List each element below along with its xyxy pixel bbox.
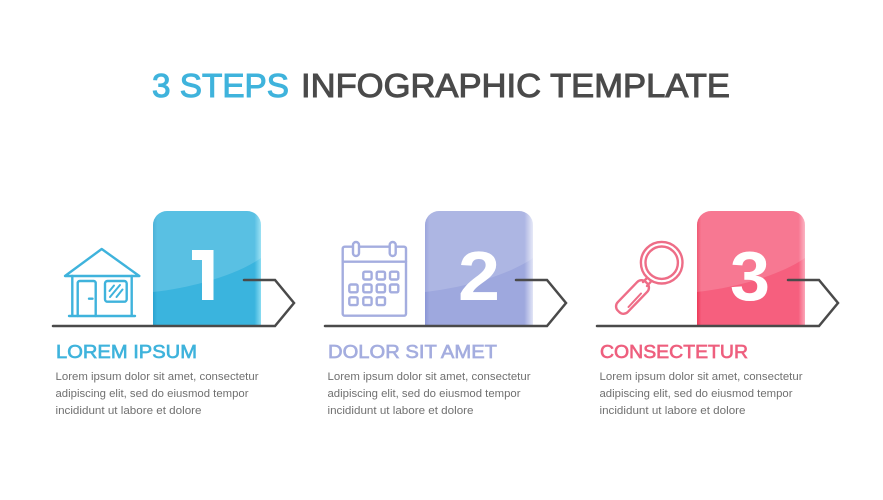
body text 3: adipiscing elit, sed do eiusmod tempor xyxy=(600,388,793,400)
body text 2: Lorem ipsum dolor sit amet, consectetur xyxy=(328,371,531,383)
body text 2 xyxy=(328,371,531,417)
arrow line 2 xyxy=(325,280,566,326)
arrow line 3 xyxy=(597,280,838,326)
heading 1: LOREM IPSUM xyxy=(56,341,197,362)
number 1: 1 xyxy=(187,237,225,315)
title: INFOGRAPHIC TEMPLATE xyxy=(301,67,730,104)
icon: calendar xyxy=(343,242,406,316)
icon: magnifying glass xyxy=(614,242,682,316)
title: 3 STEPS xyxy=(152,67,289,104)
heading 3: CONSECTETUR xyxy=(600,341,748,362)
body text 3 xyxy=(600,371,803,417)
panel: step 3 xyxy=(597,211,838,417)
body text 1: adipiscing elit, sed do eiusmod tempor xyxy=(56,388,249,400)
body text 1: Lorem ipsum dolor sit amet, consectetur xyxy=(56,371,259,383)
heading 2: DOLOR SIT AMET xyxy=(328,341,497,362)
arrow line 1 xyxy=(53,280,294,326)
body text 2: incididunt ut labore et dolore xyxy=(328,405,474,417)
panel: step 1 xyxy=(53,211,294,417)
number 2: 2 xyxy=(458,237,500,315)
body text 3: incididunt ut labore et dolore xyxy=(600,405,746,417)
number 1 xyxy=(192,250,214,300)
number box 3 xyxy=(697,211,805,326)
body text 1: incididunt ut labore et dolore xyxy=(56,405,202,417)
number box 1 xyxy=(153,211,261,326)
icon: house xyxy=(65,249,139,316)
body text 3: Lorem ipsum dolor sit amet, consectetur xyxy=(600,371,803,383)
number box 2 xyxy=(425,211,533,326)
number 3: 3 xyxy=(730,237,770,315)
body text 1 xyxy=(56,371,259,417)
body text 2: adipiscing elit, sed do eiusmod tempor xyxy=(328,388,521,400)
panel: step 2 xyxy=(325,211,566,417)
